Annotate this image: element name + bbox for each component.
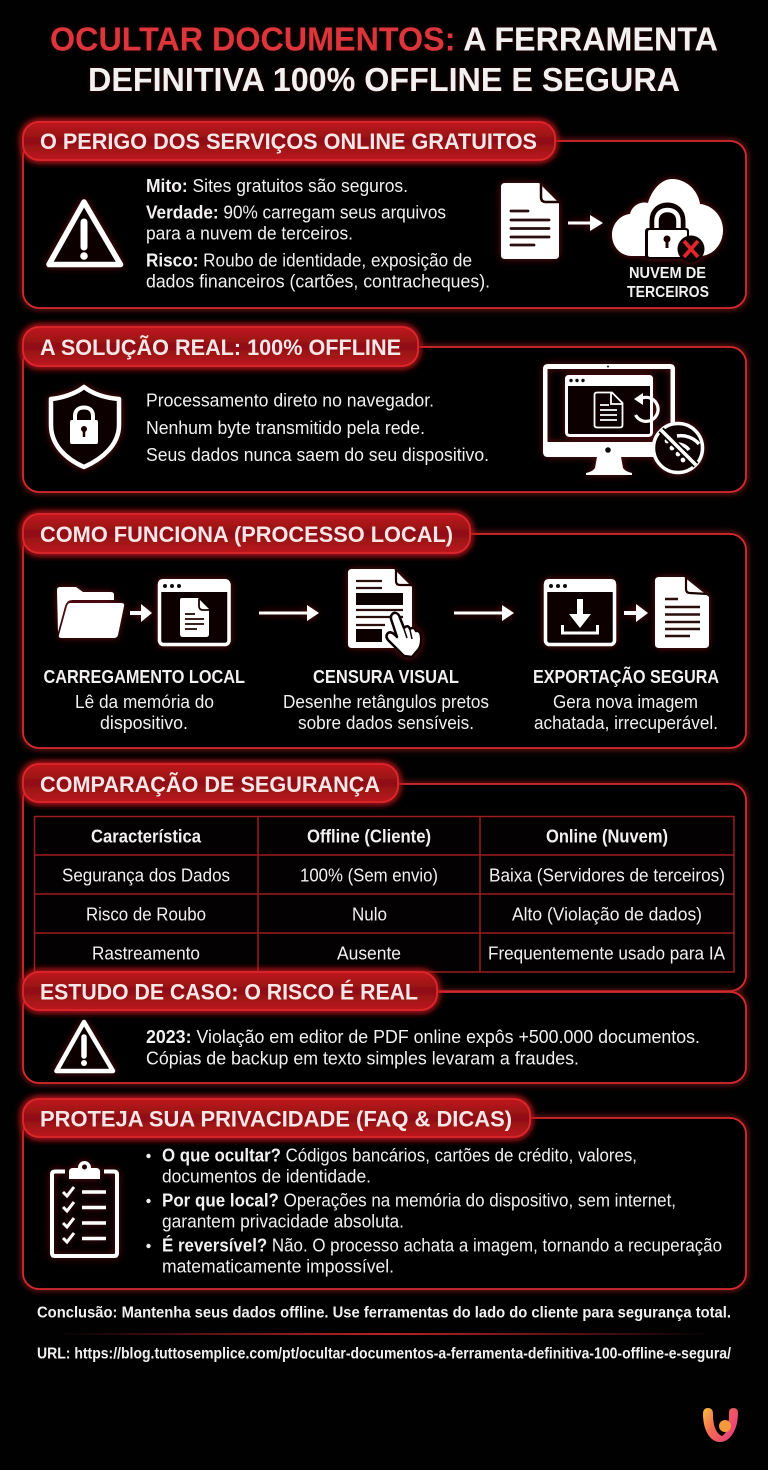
comparison table: Nulo bbox=[352, 904, 387, 924]
icon: exported document bbox=[655, 577, 709, 648]
icon: warning triangle small bbox=[56, 1022, 113, 1071]
title: OCULTAR DOCUMENTOS: A FERRAMENTA bbox=[50, 22, 718, 58]
text block: mito, verdade, risco: Risco: Roubo de identidade, exposição de bbox=[146, 250, 472, 270]
icon: clipboard checklist bbox=[52, 1161, 117, 1256]
heading: perigo bbox=[23, 122, 555, 160]
panel: o perigo dos serviços online gratuitos bbox=[23, 122, 746, 308]
comparison table: Característica bbox=[91, 826, 202, 846]
label: nuvem de terceiros: TERCEIROS bbox=[627, 284, 709, 301]
heading: proteja: PROTEJA SUA PRIVACIDADE (FAQ & DICAS) bbox=[40, 1106, 512, 1132]
text block: caso 2023: Cópias de backup em texto simples levaram a fraudes. bbox=[146, 1048, 579, 1068]
arrow: folder to window bbox=[130, 604, 152, 622]
heading: proteja bbox=[23, 1099, 530, 1137]
text block: mito, verdade, risco: Mito: Sites gratuitos são seguros. bbox=[146, 176, 408, 196]
icon: browser window with document bbox=[158, 579, 230, 644]
text block: faq list: garantem privacidade absoluta. bbox=[162, 1212, 404, 1232]
panel: estudo de caso bbox=[23, 972, 746, 1083]
text block: mito, verdade, risco: Verdade: 90% carregam seus arquivos bbox=[146, 202, 446, 222]
comparison table: Baixa (Servidores de terceiros) bbox=[489, 866, 725, 886]
step 2 text bbox=[283, 667, 489, 733]
text block: mito, verdade, risco: para a nuvem de terceiros. bbox=[146, 224, 353, 244]
panel: proteja sua privacidade bbox=[23, 1099, 746, 1289]
icon: cloud with lock bbox=[612, 179, 723, 262]
text block: solução: Seus dados nunca saem do seu dispositivo. bbox=[146, 445, 489, 465]
heading: solução: A SOLUÇÃO REAL: 100% OFFLINE bbox=[40, 335, 401, 360]
text block: faq list: matematicamente impossível. bbox=[162, 1256, 394, 1276]
heading: comparação: COMPARAÇÃO DE SEGURANÇA bbox=[40, 772, 380, 797]
step 1 text bbox=[44, 667, 245, 733]
comparison table bbox=[34, 816, 734, 972]
step 1 text: CARREGAMENTO LOCAL bbox=[44, 667, 245, 687]
text block: caso 2023 bbox=[146, 1027, 700, 1068]
panel: a solução real bbox=[23, 327, 746, 492]
conclusion text: Conclusão: Mantenha seus dados offline. Use ferramentas do lado do cliente para segurança total. bbox=[37, 1304, 731, 1322]
comparison table: Online (Nuvem) bbox=[546, 826, 668, 846]
heading: comparação bbox=[23, 764, 398, 802]
panel: comparação de segurança bbox=[23, 764, 746, 991]
arrow: step 2 to step 3 bbox=[454, 605, 514, 621]
text block: solução: Processamento direto no navegador. bbox=[146, 390, 434, 410]
step 1 text: Lê da memória do bbox=[75, 692, 214, 712]
icon: document bbox=[501, 183, 559, 259]
icon: browser window download bbox=[544, 579, 616, 644]
text block: solução: Nenhum byte transmitido pela rede. bbox=[146, 418, 425, 438]
comparison table: 100% (Sem envio) bbox=[300, 866, 438, 886]
text block: faq list: documentos de identidade. bbox=[162, 1166, 371, 1186]
heading: estudo de caso: ESTUDO DE CASO: O RISCO É REAL bbox=[40, 980, 418, 1004]
title: DEFINITIVA 100% OFFLINE E SEGURA bbox=[88, 62, 680, 99]
text block: faq list: Por que local? Operações na memória do dispositivo, sem internet, bbox=[162, 1190, 676, 1210]
step 3 text bbox=[533, 666, 719, 733]
text block: caso 2023: 2023: Violação em editor de PDF online expôs +500.000 documentos. bbox=[146, 1027, 700, 1047]
comparison table: Frequentemente usado para IA bbox=[488, 944, 725, 964]
arrow: window to document bbox=[624, 604, 648, 622]
comparison table: Risco de Roubo bbox=[86, 904, 206, 924]
icon: brand logo bbox=[703, 1408, 738, 1442]
text block: mito, verdade, risco: dados financeiros (cartões, contracheques). bbox=[146, 272, 490, 292]
icon: folder bbox=[57, 587, 124, 638]
step 2 text: CENSURA VISUAL bbox=[313, 667, 459, 687]
icon: document with redaction and hand bbox=[348, 569, 421, 657]
text block: solução bbox=[146, 390, 489, 465]
comparison table: Ausente bbox=[337, 944, 401, 964]
heading: como funciona: COMO FUNCIONA (PROCESSO LOCAL) bbox=[40, 522, 453, 547]
comparison table: Alto (Violação de dados) bbox=[512, 904, 702, 924]
step 3 text: Gera nova imagem bbox=[553, 692, 698, 712]
text block: faq list bbox=[146, 1146, 722, 1276]
step 1 text: dispositivo. bbox=[100, 713, 188, 733]
step 2 text: sobre dados sensíveis. bbox=[298, 713, 474, 733]
step 3 text: EXPORTAÇÃO SEGURA bbox=[533, 666, 719, 687]
icon: shield with lock bbox=[51, 387, 119, 467]
heading: como funciona bbox=[23, 514, 470, 553]
arrow: step 1 to step 2 bbox=[259, 605, 319, 621]
step 2 text: Desenhe retângulos pretos bbox=[283, 692, 489, 712]
heading: estudo de caso bbox=[23, 972, 437, 1010]
step 3 text: achatada, irrecuperável. bbox=[534, 713, 718, 733]
arrow: document to cloud bbox=[568, 215, 603, 231]
text block: faq list: O que ocultar? Códigos bancários, cartões de crédito, valores, bbox=[162, 1146, 637, 1166]
icon: warning triangle bbox=[49, 202, 120, 264]
comparison table: Offline (Cliente) bbox=[307, 826, 431, 846]
icon: monitor offline bbox=[543, 364, 702, 475]
label: nuvem de terceiros: NUVEM DE bbox=[629, 265, 706, 282]
text block: mito, verdade, risco bbox=[146, 176, 490, 292]
title bbox=[50, 22, 718, 99]
heading: perigo: O PERIGO DOS SERVIÇOS ONLINE GRATUITOS bbox=[40, 129, 537, 154]
panel: como funciona bbox=[23, 514, 746, 748]
comparison table: Rastreamento bbox=[92, 944, 200, 964]
comparison table: Segurança dos Dados bbox=[62, 866, 230, 886]
heading: solução bbox=[23, 327, 418, 366]
label: nuvem de terceiros bbox=[627, 265, 709, 301]
text block: faq list: É reversível? Não. O processo achata a imagem, tornando a recuperação bbox=[162, 1234, 722, 1256]
